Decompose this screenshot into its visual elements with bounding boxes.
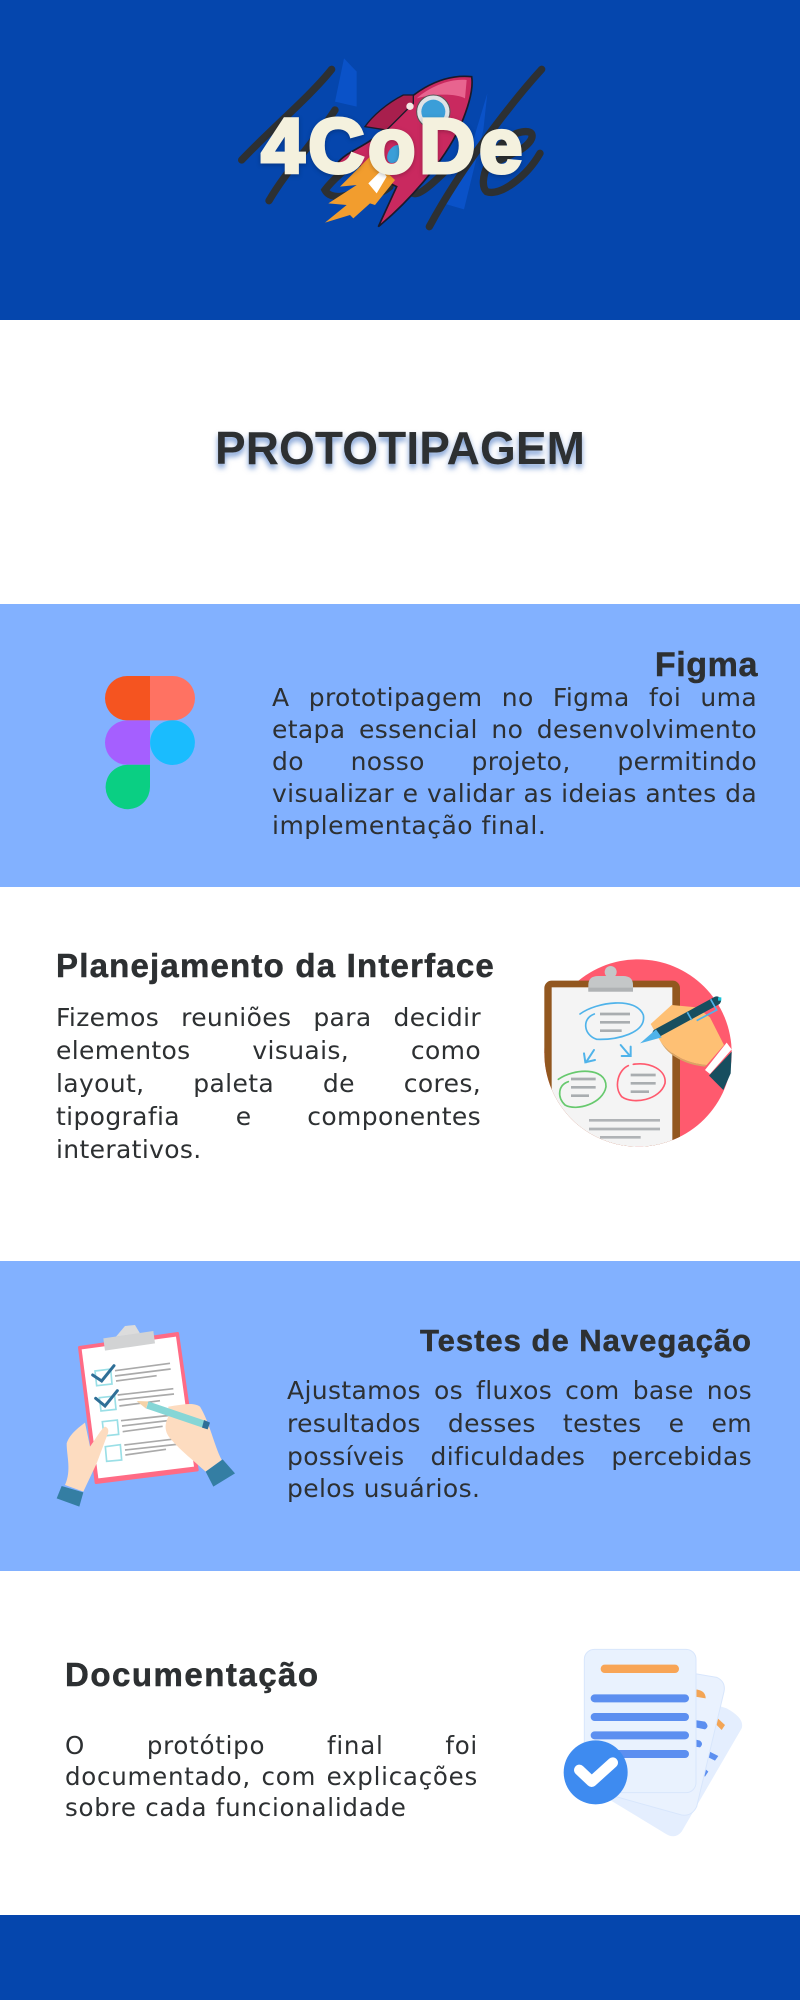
icon: clipboard with diagram and hand	[544, 959, 732, 1147]
text: Testes description: possíveis dificuldades percebidas	[287, 1442, 752, 1471]
logo blue brush marks	[335, 58, 487, 209]
icon: stacked documents with check	[564, 1648, 742, 1836]
text: Planejamento description: tipografia e componentes	[56, 1102, 481, 1131]
clipboard board	[79, 1325, 197, 1483]
text: Documentação description: sobre cada funcionalidade	[65, 1793, 407, 1822]
right hand with pencil	[137, 1401, 235, 1487]
text: Figma description: visualizar e validar as ideias antes da	[272, 779, 757, 808]
checklist items	[93, 1363, 180, 1461]
icon: checklist with hands	[56, 1325, 235, 1507]
text: Figma description: do nosso projeto, permitindo	[272, 747, 757, 776]
heading: Figma: Figma	[655, 646, 758, 684]
rocket	[325, 76, 472, 227]
heading: Testes de Navegação: Testes de Navegação	[420, 1323, 752, 1358]
panel: Planejamento da Interface	[56, 952, 732, 1158]
hand with pen	[640, 997, 732, 1090]
text: Figma description: etapa essencial no desenvolvimento	[272, 715, 757, 744]
text: Figma description	[272, 683, 757, 840]
text: Planejamento description: elementos visuais, como	[56, 1036, 481, 1065]
header band	[0, 0, 800, 320]
panel: Documentação	[0, 1571, 800, 1915]
text: Documentação description	[65, 1731, 478, 1822]
text: Testes description: resultados desses testes e em	[287, 1409, 752, 1438]
title: PROTOTIPAGEM	[215, 422, 585, 474]
panel: Testes de Navegação	[0, 1261, 800, 1571]
text: Testes description	[287, 1376, 752, 1503]
left hand	[57, 1423, 108, 1507]
text: Planejamento description: Fizemos reuniões para decidir	[56, 1003, 481, 1032]
text: Figma description: implementação final.	[272, 811, 546, 840]
text: Planejamento description: interativos.	[56, 1135, 202, 1164]
text: Planejamento description: layout, paleta de cores,	[56, 1069, 481, 1098]
text: Documentação description: O protótipo final foi	[65, 1731, 478, 1760]
logo script lettering	[242, 69, 542, 227]
text: Documentação description: documentado, com explicações	[65, 1762, 478, 1791]
heading: Documentação: Documentação	[65, 1656, 320, 1693]
logo wordmark: 4CoDe	[261, 104, 526, 190]
logo: 4CoDe with rocket	[238, 58, 546, 230]
text: Testes description: pelos usuários.	[287, 1474, 480, 1503]
text: Figma description: A prototipagem no Figma foi uma	[272, 683, 757, 712]
front sheet	[584, 1649, 696, 1793]
heading: Planejamento da Interface: Planejamento da Interface	[56, 947, 495, 984]
icon: Figma logo	[105, 676, 195, 810]
text: Planejamento description	[56, 1003, 481, 1164]
diagram bubbles and arrows	[558, 1003, 665, 1107]
check badge	[564, 1740, 628, 1804]
text: Testes description: Ajustamos os fluxos com base nos	[287, 1376, 752, 1405]
clipboard clip	[588, 966, 633, 992]
panel: Figma	[0, 604, 800, 887]
back sheets	[610, 1673, 742, 1836]
footer band	[0, 1915, 800, 2000]
